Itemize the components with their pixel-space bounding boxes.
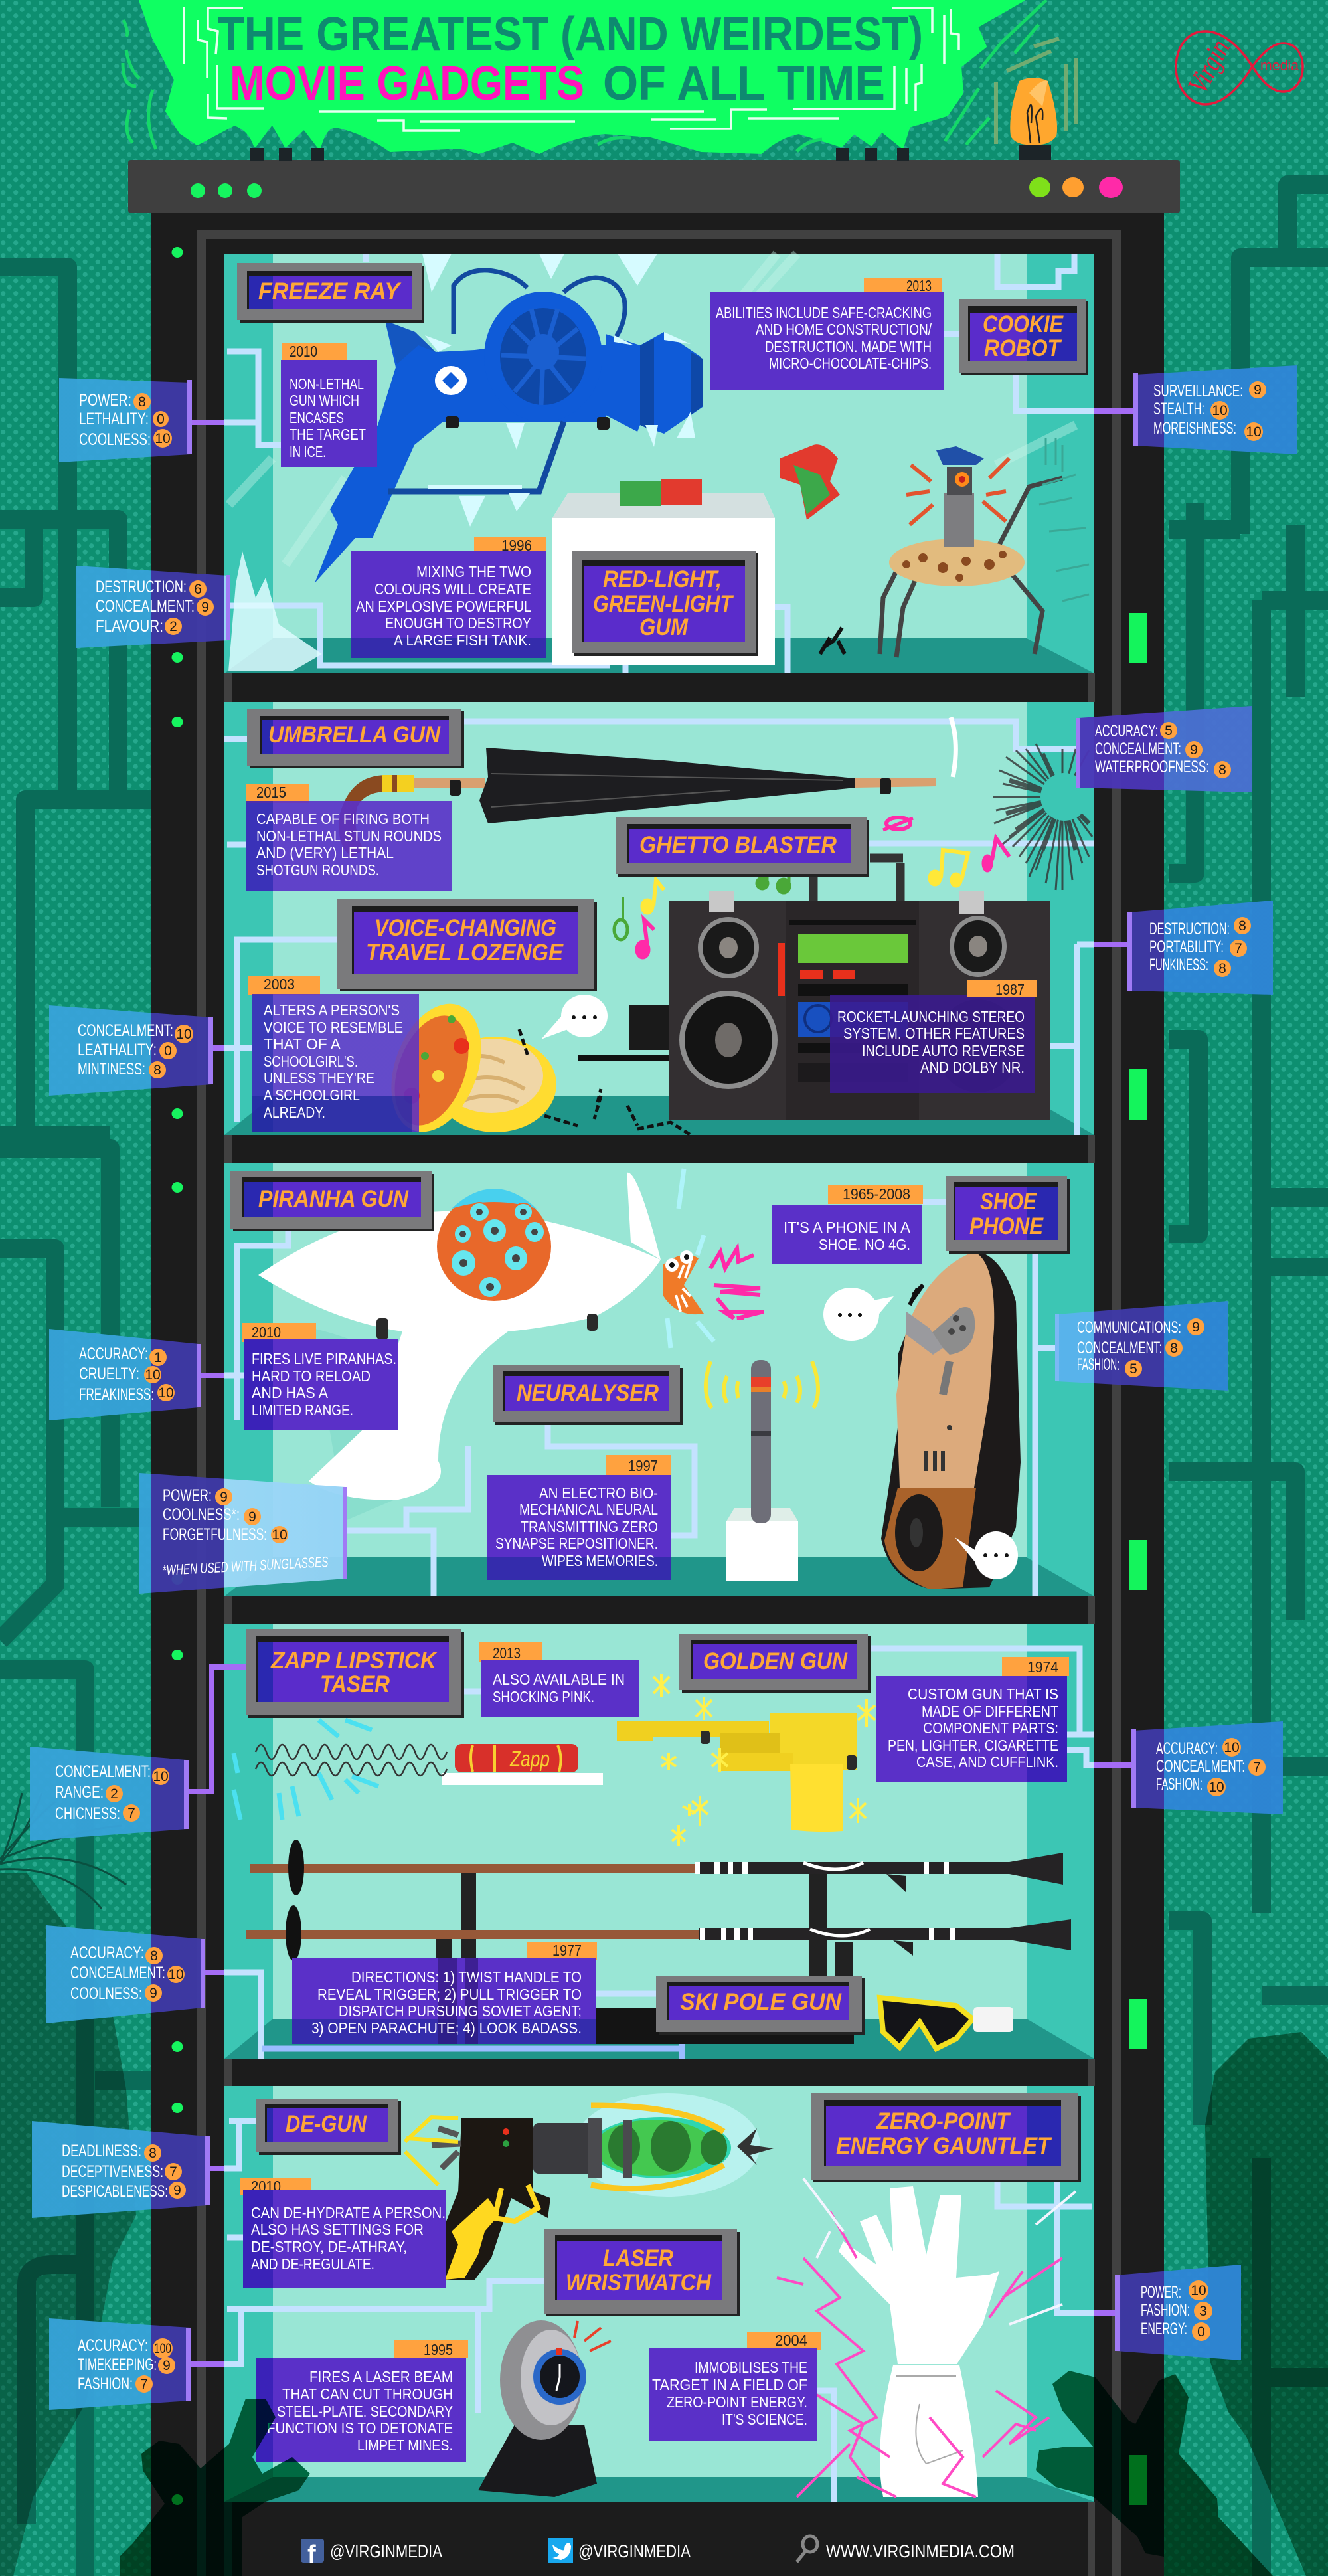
nameplate: golden gun [679,1634,871,1693]
panel: row 2 [49,702,1273,1144]
description: freeze ray: IN ICE. [290,443,326,460]
description: laser wristwatch: THAT CAN CUT THROUGH [282,2385,453,2403]
description: neuralyser: 1997 [628,1457,658,1474]
connectors row 5 [191,2121,1116,2502]
stats: ghetto blaster: PORTABILITY: [1149,938,1224,956]
panel: row 4 [30,1624,1283,2059]
description: zapp lipstick taser: SHOCKING PINK. [493,1688,594,1705]
title text: OF ALL TIME [603,57,885,110]
description: cookie robot: MICRO-CHOCOLATE-CHIPS. [769,355,932,372]
stats: shoe phone: FASHION: [1077,1355,1120,1374]
description: ski pole gun: DIRECTIONS: 1) TWIST HANDLE TO [351,1968,582,1986]
stats: golden gun: FASHION: [1156,1775,1203,1794]
description: shoe phone: SHOE. NO 4G. [819,1236,910,1253]
stats: gum [76,566,230,648]
illustration: golden gun [617,1674,875,1846]
description: de-gun [240,2178,446,2288]
description: ski pole gun: 3) OPEN PARACHUTE; 4) LOOK BADASS. [311,2019,582,2037]
footer: social links: WWW.VIRGINMEDIA.COM [826,2541,1015,2561]
illustration: cookie robot [820,438,1089,657]
nameplate: ski pole gun [656,1976,865,2035]
stats: shoe phone [1055,1301,1228,1391]
stats: de-gun: 9 [173,2183,181,2198]
stats: neuralyser [139,1473,347,1594]
description: cookie robot: ABILITIES INCLUDE SAFE-CRACKING [716,304,932,321]
description: cookie robot: DESTRUCTION. MADE WITH [765,338,932,355]
nameplate: red-light green-light gum: RED-LIGHT, [603,566,722,592]
stats: freeze ray: COOLNESS: [79,430,151,449]
description: laser wristwatch: FIRES A LASER BEAM [309,2368,453,2385]
nameplate: voice-changing travel lozenge [337,899,597,991]
stats: cookie robot: MOREISHNESS: [1153,419,1236,438]
description: umbrella gun: SHOTGUN ROUNDS. [256,861,379,879]
description: de-gun: DE-STROY, DE-ATHRAY, [251,2238,407,2255]
stats: shoe phone: CONCEALMENT: [1077,1339,1162,1357]
stats: shoe phone: 9 [1192,1320,1200,1335]
stats: gum: FLAVOUR: [96,617,163,636]
stats: ski pole gun [46,1925,205,2023]
description: golden gun: CUSTOM GUN THAT IS [908,1685,1058,1703]
description: shoe phone: 1965-2008 [843,1185,910,1203]
stats: ski pole gun: 8 [150,1948,158,1964]
description: gauntlet: TARGET IN A FIELD OF [652,2376,807,2393]
description: lozenge: SCHOOLGIRL'S. [264,1053,358,1070]
description: freeze ray: GUN WHICH [290,392,359,409]
nameplate: laser wristwatch: WRISTWATCH [566,2270,712,2296]
icon: fern blades [0,1793,126,1909]
description: zapp lipstick taser: ALSO AVAILABLE IN [493,1671,625,1688]
illustration: voice-changing lozenge tin [375,991,691,1144]
footer: social links: @VIRGINMEDIA [578,2541,691,2561]
logo: Virgin Media: Virgin [1181,34,1236,99]
illustration: piranha gun [258,1169,764,1521]
description: golden gun: MADE OF DIFFERENT [922,1703,1058,1720]
description: freeze ray: THE TARGET [290,426,366,443]
stats: cookie robot: STEALTH: [1153,400,1204,418]
stats: ghetto blaster: 8 [1238,918,1246,934]
description: zapp lipstick taser: 2013 [493,1644,521,1662]
stats: ghetto blaster [1127,901,1273,995]
stats: golden gun [1131,1721,1283,1814]
description: gum: 1996 [501,537,532,554]
description: golden gun: COMPONENT PARTS: [923,1719,1058,1737]
description: cookie robot: AND HOME CONSTRUCTION/ [756,321,932,338]
description: gum: A LARGE FISH TANK. [394,632,531,649]
footer: social links: @VIRGINMEDIA [330,2541,442,2561]
stats: freeze ray [59,378,192,462]
description: gum: COLOURS WILL CREATE [374,580,531,598]
nameplate: red-light green-light gum: GREEN-LIGHT [593,591,734,617]
foreground plants [120,2371,1273,2576]
nameplate: zero-point energy gauntlet [811,2093,1081,2182]
description: lozenge: THAT OF A [264,1035,341,1053]
stats: umbrella gun: 9 [1190,742,1198,758]
illustration: zapp lipstick taser [234,1720,603,1820]
description: lozenge [248,976,419,1132]
description: ghetto blaster [830,980,1037,1093]
stats: shoe phone: 5 [1129,1361,1137,1377]
description: de-gun: CAN DE-HYDRATE A PERSON. [251,2204,446,2221]
stats: laser wristwatch: 100 [154,2341,171,2356]
description: piranha gun: LIMITED RANGE. [252,1401,353,1418]
description: umbrella gun: NON-LETHAL STUN ROUNDS [256,827,442,845]
description: ski pole gun: REVEAL TRIGGER; 2) PULL TRIGGER TO [317,1986,582,2003]
description: zapp lipstick taser [479,1642,639,1717]
nameplate: laser wristwatch: LASER [603,2245,674,2271]
nameplate: piranha gun: PIRANHA GUN [258,1186,409,1212]
nameplate: golden gun: GOLDEN GUN [703,1648,848,1674]
description: ghetto blaster: AND DOLBY NR. [920,1059,1025,1076]
stats: umbrella gun [1076,706,1252,792]
description: gum: MIXING THE TWO [416,563,531,580]
stats: cookie robot: SURVEILLANCE: [1153,382,1243,400]
stats: golden gun: 7 [1253,1760,1261,1775]
description: freeze ray [281,343,377,467]
stats: ghetto blaster: FUNKINESS: [1149,956,1208,974]
stats: ski pole gun: ACCURACY: [70,1944,144,1962]
stats: ghetto blaster: DESTRUCTION: [1149,920,1230,938]
title text: THE GREATEST (AND WEIRDEST) [218,8,923,61]
stats: de-gun: DECEPTIVENESS: [62,2162,163,2181]
stats: lozenge: CONCEALMENT: [78,1021,173,1040]
stats: gum: 2 [169,619,177,634]
cabinet top cap with lights [128,148,1180,213]
description: gum [351,537,546,658]
description: piranha gun: AND HAS A [252,1384,329,1401]
stats: zapp lipstick taser: 7 [127,1806,135,1821]
icon: ants [519,1029,691,1135]
description: gum: AN EXPLOSIVE POWERFUL [356,598,531,615]
icon: twitter [548,2538,573,2563]
stats: laser wristwatch [49,2318,191,2410]
stats: zapp lipstick taser [30,1747,189,1841]
nameplate: ghetto blaster: GHETTO BLASTER [639,832,837,858]
illustration: freeze ray gun [228,254,703,671]
nameplate: zapp lipstick taser [246,1629,464,1718]
description: freeze ray: NON-LETHAL [290,375,364,392]
description: laser wristwatch: STEEL-PLATE. SECONDARY [277,2403,453,2420]
stats: lozenge: LEATHALITY: [78,1041,157,1059]
nameplate: cookie robot [959,299,1088,375]
description: golden gun: 1974 [1027,1658,1058,1675]
stats: umbrella gun: 5 [1165,723,1173,738]
description: shoe phone [772,1185,923,1264]
stats: zapp lipstick taser: RANGE: [55,1783,104,1802]
description: gauntlet [649,2332,821,2441]
nameplate: de-gun: DE-GUN [286,2111,367,2137]
illustration: red-light green-light gum pedestal [552,444,840,665]
stats: piranha gun: 10 [158,1385,174,1401]
stats: piranha gun: ACCURACY: [79,1345,148,1363]
stats: ski pole gun: 9 [149,1986,157,2001]
stats: de-gun: DESPICABLENESS: [62,2182,168,2201]
description: piranha gun: HARD TO RELOAD [252,1367,371,1385]
description: ski pole gun: DISPATCH PURSUING SOVIET AGENT; [339,2002,582,2019]
stats: gauntlet: 10 [1191,2283,1206,2298]
nameplate: red-light green-light gum [572,551,758,656]
icon: facebook: f [307,2541,316,2569]
stats: ghetto blaster: 7 [1234,941,1242,956]
description: laser wristwatch [256,2340,468,2462]
stats: gum: CONCEALMENT: [96,597,195,616]
description: ski pole gun [292,1942,597,2044]
description: gauntlet: ZERO-POINT ENERGY. [667,2393,807,2411]
description: freeze ray: ENCASES [290,409,344,426]
description: golden gun: CASE, AND CUFFLINK. [916,1753,1058,1770]
stats: ski pole gun: 10 [168,1967,184,1982]
stats: shoe phone: 8 [1170,1341,1178,1356]
stats: neuralyser: POWER: [163,1486,212,1505]
stats: lozenge: 8 [153,1063,161,1078]
stats: golden gun: CONCEALMENT: [1156,1757,1245,1776]
stats: neuralyser: 9 [248,1509,256,1525]
description: cookie robot: 2013 [906,277,932,294]
footer: social links [301,2536,1015,2569]
illustration: zero-point energy gauntlet [777,2178,1076,2497]
description: neuralyser: AN ELECTRO BIO- [539,1484,658,1502]
description: cookie robot [710,277,944,390]
stats: freeze ray: 8 [138,394,146,410]
description: neuralyser [487,1455,671,1580]
stats: ski pole gun: CONCEALMENT: [70,1964,165,1982]
description: laser wristwatch: LIMPET MINES. [357,2437,453,2454]
stats: de-gun: 7 [169,2164,177,2180]
stats: cookie robot [1133,365,1297,454]
illustration: ski goggles [880,1998,1013,2049]
stats: lozenge: 0 [164,1043,172,1059]
illustration: de-gun [405,2093,774,2280]
nameplate: voice-changing travel lozenge: VOICE-CHANGING [374,915,556,941]
stats: freeze ray: 10 [155,431,171,446]
nameplate: neuralyser: NEURALYSER [517,1380,659,1406]
nameplate: shoe phone: PHONE [969,1213,1044,1239]
cabinet body [151,213,1164,2576]
stats: de-gun [32,2121,210,2218]
nameplate: piranha gun [230,1171,434,1231]
stats: cookie robot: 10 [1212,403,1228,418]
stats: laser wristwatch: 7 [140,2377,148,2392]
panel: row 5 [32,2086,1241,2502]
description: lozenge: UNLESS THEY'RE [264,1069,374,1086]
description: ghetto blaster: INCLUDE AUTO REVERSE [862,1042,1025,1059]
nameplate: zapp lipstick taser: TASER [320,1672,390,1697]
description: umbrella gun: AND (VERY) LETHAL [256,844,394,861]
description: lozenge: VOICE TO RESEMBLE [264,1019,403,1036]
icon: ant [910,1285,923,1305]
stats: de-gun: 8 [149,2146,157,2161]
description: gauntlet: IT'S SCIENCE. [722,2411,807,2428]
connectors row 2 [212,721,1129,1135]
illustration: laser wristwatch [478,2320,611,2497]
nameplate: cookie robot: ROBOT [984,335,1062,361]
description: neuralyser: MECHANICAL NEURAL [519,1501,658,1518]
description: ghetto blaster: ROCKET-LAUNCHING STEREO [837,1008,1025,1025]
stats: neuralyser: FORGETFULNESS: [163,1525,267,1544]
description: de-gun: 2010 [251,2178,281,2195]
illustration: umbrella gun [339,717,955,857]
stats: golden gun: ACCURACY: [1156,1739,1218,1758]
description: piranha gun: 2010 [252,1324,281,1341]
nameplate: ski pole gun: SKI POLE GUN [680,1989,842,2015]
description: lozenge: ALREADY. [264,1104,325,1121]
icon: magnifier [797,2536,817,2562]
icons: music notes [614,817,1009,959]
stats: zapp lipstick taser: CONCEALMENT: [55,1762,151,1781]
stats: piranha gun: 1 [154,1350,162,1365]
nameplate: umbrella gun: UMBRELLA GUN [268,722,441,748]
description: ski pole gun: 1977 [552,1942,582,1959]
stats: freeze ray: LETHALITY: [79,410,149,428]
stats: lozenge [49,1005,213,1096]
stats: neuralyser: 9 [220,1490,228,1505]
description: piranha gun: FIRES LIVE PIRANHAS. [252,1350,396,1367]
connectors row 4 [189,1648,1133,2059]
illustration: zapp lipstick taser: Zapp [509,1747,550,1772]
nameplate: zero-point energy gauntlet: ENERGY GAUNTLET [836,2133,1052,2159]
title slime blob [123,0,1076,153]
stats: umbrella gun: ACCURACY: [1095,722,1158,740]
nameplate: neuralyser [493,1365,683,1425]
stats: neuralyser: COOLNESS*: [163,1505,240,1524]
description: laser wristwatch: FUNCTION IS TO DETONATE [267,2419,453,2437]
panel: row 1 [59,254,1297,673]
description: gauntlet: 2004 [775,2332,807,2349]
icon: facebook [301,2539,324,2569]
stats: piranha gun [49,1329,201,1420]
nameplate: zero-point energy gauntlet: ZERO-POINT [876,2108,1011,2134]
nameplate: cookie robot: COOKIE [983,311,1064,337]
description: gauntlet: IMMOBILISES THE [695,2359,807,2376]
stats: piranha gun: CRUELTY: [79,1365,139,1383]
side indicator lights [171,247,183,2505]
description: neuralyser: TRANSMITTING ZERO [521,1518,658,1535]
icon: ant [820,628,845,654]
stats: gum: 9 [201,600,209,615]
nameplate: ghetto blaster [616,817,869,877]
stats: gauntlet [1115,2265,1241,2360]
stats: gum: DESTRUCTION: [96,578,187,596]
stats: laser wristwatch: ACCURACY: [78,2336,148,2355]
stats: freeze ray: POWER: [79,391,131,410]
stats: shoe phone: COMMUNICATIONS: [1077,1318,1181,1337]
stats: umbrella gun: CONCEALMENT: [1095,740,1181,758]
description: golden gun [876,1657,1069,1782]
background plants [0,1873,1328,2576]
description: umbrella gun: 2015 [256,784,286,801]
description: de-gun: ALSO HAS SETTINGS FOR [251,2221,424,2238]
stats: gauntlet: 3 [1199,2304,1207,2319]
description: laser wristwatch: 1995 [424,2341,453,2358]
stats: neuralyser: *WHEN USED WITH SUNGLASSES [162,1553,329,1579]
logo: Virgin Media [1176,31,1303,104]
stats: ghetto blaster: 8 [1218,961,1226,976]
description: umbrella gun [246,784,452,891]
green level bars [1129,613,1147,2505]
stats: freeze ray: 0 [157,412,165,427]
stats: gauntlet: 0 [1197,2324,1205,2340]
description: lozenge: ALTERS A PERSON'S [264,1001,400,1019]
description: piranha gun [242,1323,398,1430]
nameplate: zapp lipstick taser: ZAPP LIPSTICK [270,1648,438,1674]
stats: laser wristwatch: TIMEKEEPING: [78,2356,157,2374]
description: de-gun: AND DE-REGULATE. [251,2255,374,2273]
stats: piranha gun: FREAKINESS: [79,1385,154,1404]
description: ghetto blaster: 1987 [995,981,1025,998]
connectors row 1 [191,254,1135,673]
nameplate: de-gun [256,2099,401,2155]
stats: gauntlet: POWER: [1141,2283,1181,2302]
illustration: ink burst [993,744,1092,890]
description: gum: ENOUGH TO DESTROY [385,614,531,632]
nameplate: voice-changing travel lozenge: TRAVEL LOZENGE [366,940,564,966]
stats: de-gun: DEADLINESS: [62,2142,141,2160]
illustration: ski pole guns [246,1840,1071,2044]
stats: gauntlet: ENERGY: [1141,2320,1187,2338]
description: freeze ray: 2010 [290,343,317,360]
stats: neuralyser: 10 [272,1527,288,1543]
description: golden gun: PEN, LIGHTER, CIGARETTE [888,1737,1058,1754]
illustration: ghetto blaster [578,858,1050,1120]
description: lozenge: A SCHOOLGIRL [264,1086,360,1104]
stats: gauntlet: FASHION: [1141,2301,1190,2320]
stats: umbrella gun: WATERPROOFNESS: [1095,758,1209,776]
stats: golden gun: 10 [1224,1740,1240,1755]
stats: laser wristwatch: 9 [163,2358,171,2373]
stats: gum: 6 [194,582,202,597]
nameplate: umbrella gun [247,709,464,768]
nameplate: red-light green-light gum: GUM [639,614,689,640]
title text [218,8,923,110]
stats: zapp lipstick taser: 10 [153,1769,169,1784]
description: neuralyser: SYNAPSE REPOSITIONER. [495,1535,658,1552]
stats: cookie robot: 10 [1246,424,1262,440]
stats: cookie robot: 9 [1254,383,1262,398]
nameplate: shoe phone: SHOE [980,1189,1037,1215]
nameplate: shoe phone [946,1176,1070,1254]
stats: laser wristwatch: FASHION: [78,2375,133,2393]
description: umbrella gun: CAPABLE OF FIRING BOTH [256,810,430,827]
panel: row 3 [49,1163,1228,1596]
stats: zapp lipstick taser: 2 [110,1786,118,1802]
illustration: shoe phone [823,1250,1021,1589]
nameplate: freeze ray [237,263,424,323]
description: neuralyser: WIPES MEMORIES. [542,1552,658,1569]
connectors row 3 [199,1202,1057,1596]
description: ghetto blaster: SYSTEM. OTHER FEATURES [843,1025,1025,1042]
stats: lozenge: 10 [176,1027,192,1042]
illustration: neuralyser [706,1360,818,1581]
stats: piranha gun: 10 [145,1367,161,1383]
logo: Virgin Media: media [1260,57,1299,74]
title text: MOVIE GADGETS [230,57,584,110]
stats: lozenge: MINTINESS: [78,1060,145,1078]
stats: golden gun: 10 [1208,1780,1224,1795]
icon: orange warning bulb [1010,78,1057,161]
stats: umbrella gun: 8 [1218,762,1226,778]
nameplate: laser wristwatch [544,2229,740,2316]
nameplate: freeze ray: FREEZE RAY [258,278,402,304]
description: shoe phone: IT'S A PHONE IN A [784,1219,911,1236]
stats: ski pole gun: COOLNESS: [70,1984,142,2003]
description: lozenge: 2003 [264,976,295,993]
stats: zapp lipstick taser: CHICNESS: [55,1804,120,1823]
